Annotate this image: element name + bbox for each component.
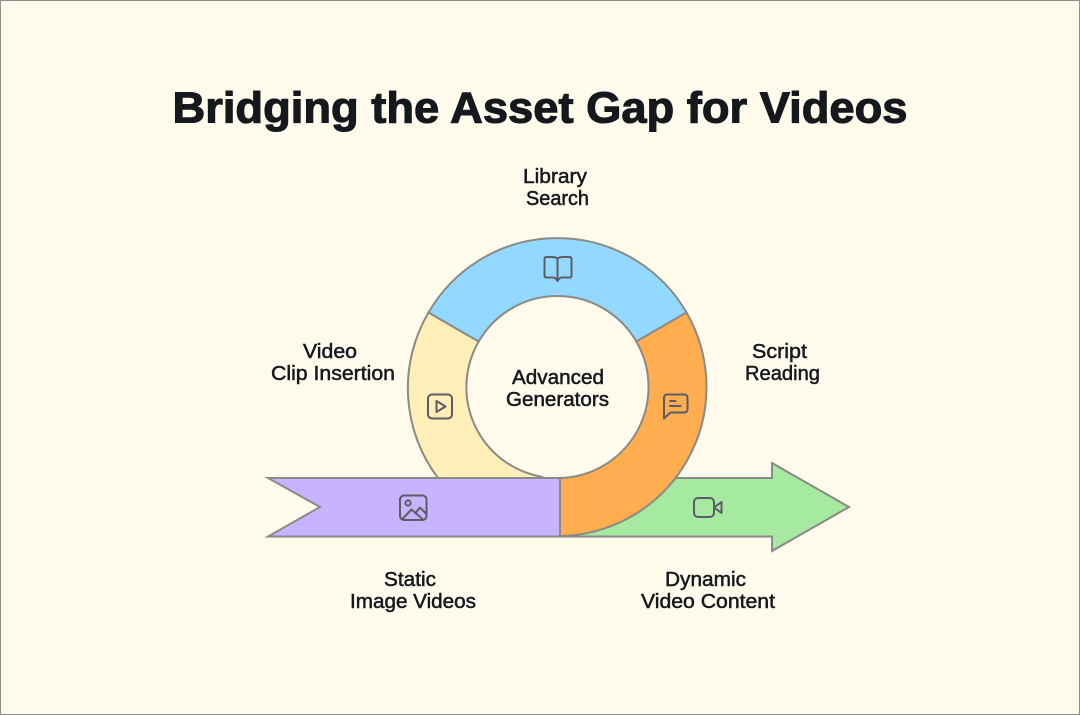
ring segment: library search — [428, 238, 686, 342]
label: library search: Library — [523, 166, 587, 188]
label: video clip insertion: Clip Insertion — [271, 363, 395, 385]
label: dynamic video content: Video Content — [641, 591, 775, 613]
icon: play button — [428, 394, 452, 418]
title: Bridging the Asset Gap for Videos — [172, 84, 908, 132]
icon: book — [544, 257, 572, 281]
center label: advanced generators: Generators — [506, 389, 609, 411]
center label: advanced generators — [506, 367, 609, 411]
icon: video camera — [694, 498, 722, 517]
arrow: dynamic video content — [560, 463, 849, 551]
label: video clip insertion — [271, 341, 395, 385]
label: library search — [523, 166, 589, 210]
icon: chat bubble — [664, 394, 688, 418]
label: video clip insertion: Video — [303, 341, 357, 363]
label: dynamic video content — [641, 569, 775, 613]
label: static image videos: Image Videos — [350, 591, 476, 613]
ring segment: video clip insertion — [408, 312, 545, 478]
icon: image — [400, 496, 426, 520]
label: library search: Search — [526, 188, 589, 210]
label: static image videos: Static — [384, 569, 436, 591]
label: script reading: Script — [752, 341, 807, 363]
center label: advanced generators: Advanced — [512, 367, 604, 389]
label: static image videos — [350, 569, 476, 613]
ring segment: script reading — [560, 312, 706, 536]
label: script reading: Reading — [745, 363, 820, 385]
banner: static image videos — [268, 478, 560, 536]
label: script reading — [745, 341, 820, 385]
label: dynamic video content: Dynamic — [665, 569, 746, 591]
